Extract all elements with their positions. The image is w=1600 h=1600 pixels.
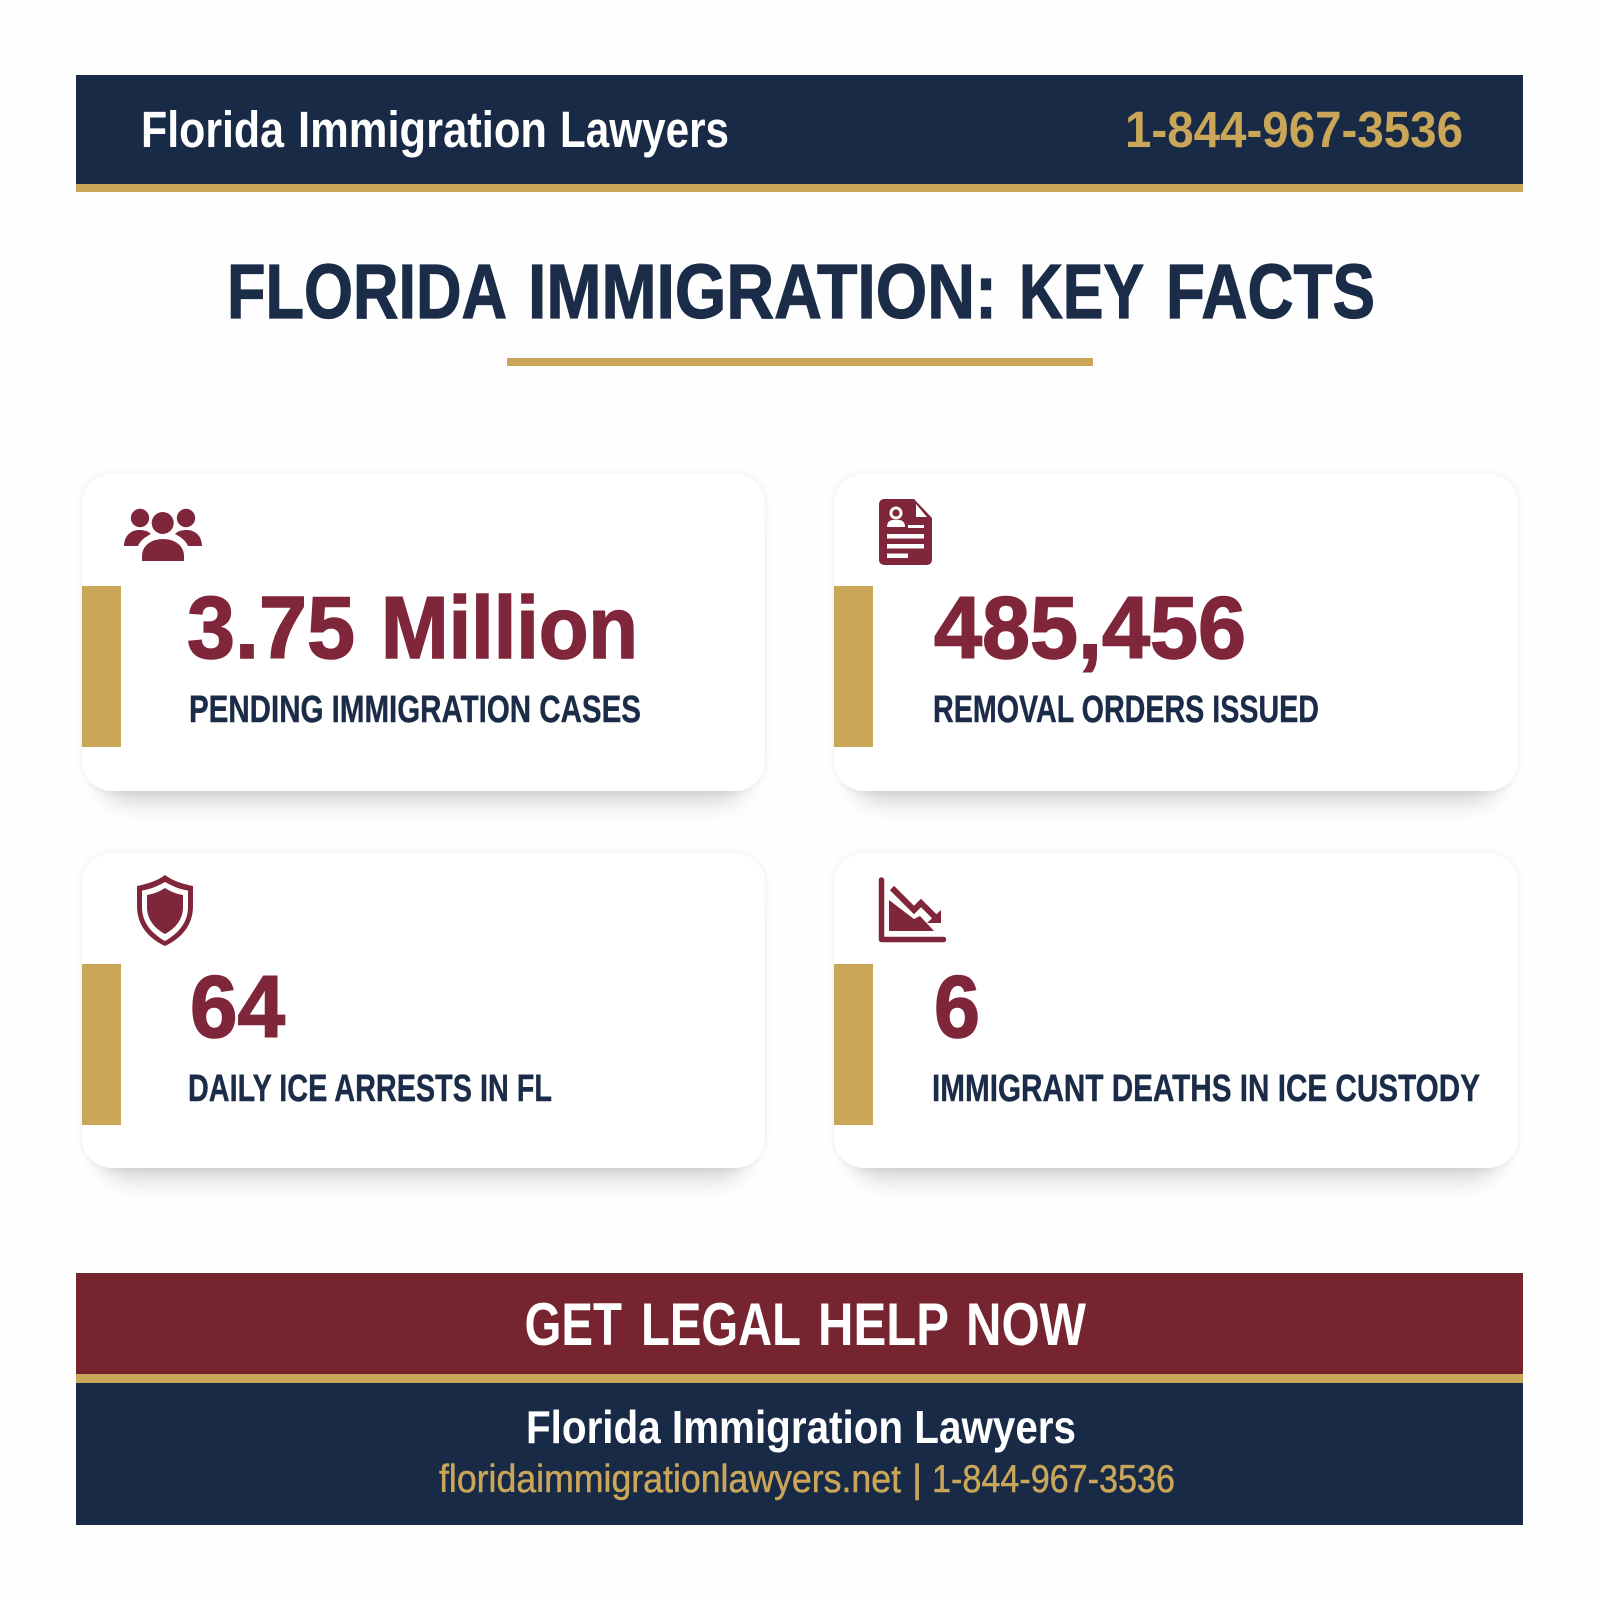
icon: declining chart bbox=[882, 880, 944, 940]
panel: pending cases bbox=[82, 474, 765, 803]
call-to-action text: LEGAL bbox=[641, 1291, 801, 1358]
value: 6 bbox=[934, 957, 980, 1056]
icon: people bbox=[124, 509, 202, 561]
panel: removal orders bbox=[834, 474, 1518, 803]
footer firm name: Florida Immigration Lawyers bbox=[526, 1401, 1076, 1453]
label: REMOVAL ORDERS ISSUED bbox=[933, 689, 1319, 731]
value: 485,456 bbox=[934, 578, 1246, 677]
firm name: Immigration bbox=[298, 101, 547, 158]
footer contact: 1-844-967-3536 bbox=[932, 1458, 1175, 1501]
value: 64 bbox=[190, 957, 285, 1056]
value: 3.75 bbox=[187, 578, 355, 677]
accent bar bbox=[834, 964, 873, 1125]
label: DAILY ICE ARRESTS IN FL bbox=[188, 1068, 552, 1110]
footer contact: | bbox=[912, 1458, 922, 1501]
label: PENDING IMMIGRATION CASES bbox=[189, 689, 641, 731]
call-to-action text: GET bbox=[524, 1291, 622, 1358]
panel: daily arrests bbox=[82, 853, 765, 1180]
title: FACTS bbox=[1166, 249, 1375, 335]
call-to-action banner bbox=[76, 1273, 1523, 1375]
title: FLORIDA bbox=[227, 249, 507, 335]
icon: document bbox=[879, 499, 932, 565]
header bar bbox=[76, 75, 1523, 192]
title: KEY bbox=[1019, 249, 1144, 335]
firm name: Florida bbox=[141, 101, 285, 158]
firm name: Lawyers bbox=[560, 101, 729, 158]
accent bar bbox=[834, 586, 873, 747]
footer contact: floridaimmigrationlawyers.net bbox=[439, 1458, 901, 1501]
value: Million bbox=[381, 578, 638, 677]
banner divider bbox=[76, 1374, 1523, 1383]
icon: shield bbox=[137, 875, 193, 946]
footer bbox=[76, 1383, 1523, 1525]
panel: deaths in custody bbox=[834, 853, 1518, 1180]
phone number: 1-844-967-3536 bbox=[1125, 101, 1463, 158]
title: IMMIGRATION: bbox=[528, 249, 997, 335]
accent bar bbox=[82, 964, 121, 1125]
call-to-action text: NOW bbox=[966, 1291, 1086, 1358]
title underline bbox=[507, 358, 1093, 366]
accent bar bbox=[82, 586, 121, 747]
call-to-action text: HELP bbox=[818, 1291, 949, 1358]
